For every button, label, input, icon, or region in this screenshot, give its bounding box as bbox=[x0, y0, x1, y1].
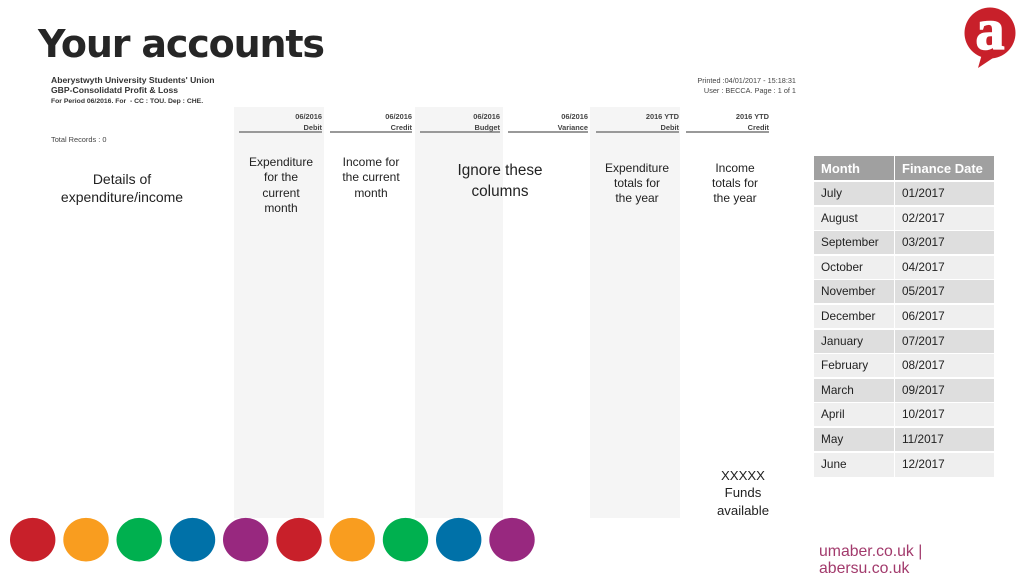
panel: YTD debit column shading bbox=[590, 107, 680, 518]
row: July: 01/2017 bbox=[902, 186, 945, 200]
print details: User : BECCA. Page : 1 of 1 bbox=[704, 86, 796, 95]
row: December bbox=[814, 305, 994, 328]
row: March: 09/2017 bbox=[902, 383, 945, 397]
column header: variance: 06/2016 bbox=[561, 112, 588, 121]
coloured circles strip bbox=[10, 518, 535, 562]
print details: Printed :04/01/2017 - 15:18:31 bbox=[697, 76, 796, 85]
note: funds available: XXXXX bbox=[721, 468, 765, 482]
report heading bbox=[51, 75, 214, 105]
note: funds available: available bbox=[717, 503, 769, 518]
column header: YTD debit: Debit bbox=[661, 123, 679, 132]
row: November: November bbox=[821, 284, 875, 298]
row: October bbox=[814, 256, 994, 279]
note: expenditure month: Expenditure bbox=[249, 155, 313, 169]
row: February: 08/2017 bbox=[902, 358, 945, 372]
column header: debit: 06/2016 bbox=[295, 112, 322, 121]
note: income month: Income for bbox=[343, 155, 399, 169]
column header: credit: 06/2016 bbox=[385, 112, 412, 121]
row: July: July bbox=[821, 186, 842, 200]
table header: Month bbox=[821, 161, 860, 176]
row: December: 06/2017 bbox=[902, 309, 945, 323]
row: May: May bbox=[821, 432, 843, 446]
note: expenditure year: the year bbox=[615, 191, 659, 205]
column header: budget bbox=[420, 111, 500, 133]
report heading: For Period 06/2016. For - CC : TOU. Dep : CHE. bbox=[51, 98, 203, 105]
report heading: GBP-Consolidatd Profit & Loss bbox=[51, 85, 178, 95]
row: August: 02/2017 bbox=[902, 211, 945, 225]
row: November bbox=[814, 280, 994, 303]
column header: budget: 06/2016 bbox=[473, 112, 500, 121]
column header: YTD credit: Credit bbox=[748, 123, 769, 132]
note: funds available: Funds bbox=[725, 485, 761, 500]
row: August bbox=[814, 207, 994, 230]
row: March bbox=[814, 379, 994, 402]
note: income year: Income bbox=[715, 160, 755, 174]
table header bbox=[814, 156, 994, 180]
note: expenditure month: for the bbox=[264, 170, 298, 184]
panel: debit column shading bbox=[234, 107, 324, 518]
column header: budget: Budget bbox=[475, 123, 500, 132]
title: Your accounts bbox=[38, 22, 324, 66]
column header: debit: Debit bbox=[304, 123, 322, 132]
row: January: 07/2017 bbox=[902, 334, 945, 348]
row: February: February bbox=[821, 358, 868, 372]
note: ignore columns bbox=[457, 162, 543, 200]
row: September: 03/2017 bbox=[902, 235, 945, 249]
note: expenditure year: Expenditure bbox=[605, 160, 669, 174]
row: May: 11/2017 bbox=[902, 432, 944, 446]
row: October: October bbox=[821, 260, 863, 274]
column header: variance: Variance bbox=[558, 123, 588, 132]
row: January: January bbox=[821, 334, 863, 348]
note: expenditure year bbox=[605, 160, 669, 205]
column header: debit bbox=[239, 111, 322, 133]
row: April: April bbox=[821, 407, 845, 421]
note: income month bbox=[342, 155, 400, 200]
column header: YTD debit bbox=[596, 111, 679, 133]
note: income year: the year bbox=[713, 191, 757, 205]
note: ignore columns: Ignore these bbox=[457, 162, 543, 179]
note: income month: the current bbox=[342, 170, 400, 184]
note: details: expenditure/income bbox=[61, 189, 183, 205]
note: funds available bbox=[717, 468, 769, 518]
note: expenditure month: month bbox=[264, 201, 298, 215]
row: June: June bbox=[821, 457, 847, 471]
note: details: Details of bbox=[93, 171, 151, 187]
total records: Total Records : 0 bbox=[51, 134, 106, 144]
note: income month: month bbox=[354, 186, 388, 200]
footer links: umaber.co.uk | bbox=[819, 542, 922, 560]
print details bbox=[697, 76, 796, 95]
row: April: 10/2017 bbox=[902, 407, 945, 421]
row: September: September bbox=[821, 235, 879, 249]
row: June bbox=[814, 453, 994, 477]
row: July bbox=[814, 182, 994, 205]
column header: credit bbox=[330, 111, 412, 133]
row: May bbox=[814, 428, 994, 451]
note: income year bbox=[712, 160, 758, 205]
row: February bbox=[814, 354, 994, 377]
row: October: 04/2017 bbox=[902, 260, 945, 274]
column header: variance bbox=[508, 111, 588, 133]
note: income year: totals for bbox=[712, 176, 758, 190]
row: December: December bbox=[821, 309, 875, 323]
report heading: Aberystwyth University Students' Union bbox=[51, 75, 214, 85]
row: August: August bbox=[821, 211, 858, 225]
note: expenditure month: current bbox=[262, 186, 300, 200]
row: September bbox=[814, 231, 994, 254]
note: expenditure year: totals for bbox=[614, 176, 660, 190]
row: June: 12/2017 bbox=[902, 457, 945, 471]
row: January bbox=[814, 330, 994, 353]
row: April bbox=[814, 403, 994, 426]
note: ignore columns: columns bbox=[472, 182, 528, 200]
column header: YTD debit: 2016 YTD bbox=[646, 112, 679, 121]
icon: red speech bubble logo bbox=[964, 4, 1016, 68]
row: March: March bbox=[821, 383, 854, 397]
note: details bbox=[61, 171, 183, 205]
column header: YTD credit bbox=[686, 111, 769, 133]
row: November: 05/2017 bbox=[902, 284, 945, 298]
footer links bbox=[819, 542, 922, 575]
column header: YTD credit: 2016 YTD bbox=[736, 112, 769, 121]
note: expenditure month bbox=[249, 155, 313, 215]
panel: budget column shading bbox=[415, 107, 503, 518]
table header: Finance Date bbox=[902, 161, 983, 176]
column header: credit: Credit bbox=[391, 123, 412, 132]
